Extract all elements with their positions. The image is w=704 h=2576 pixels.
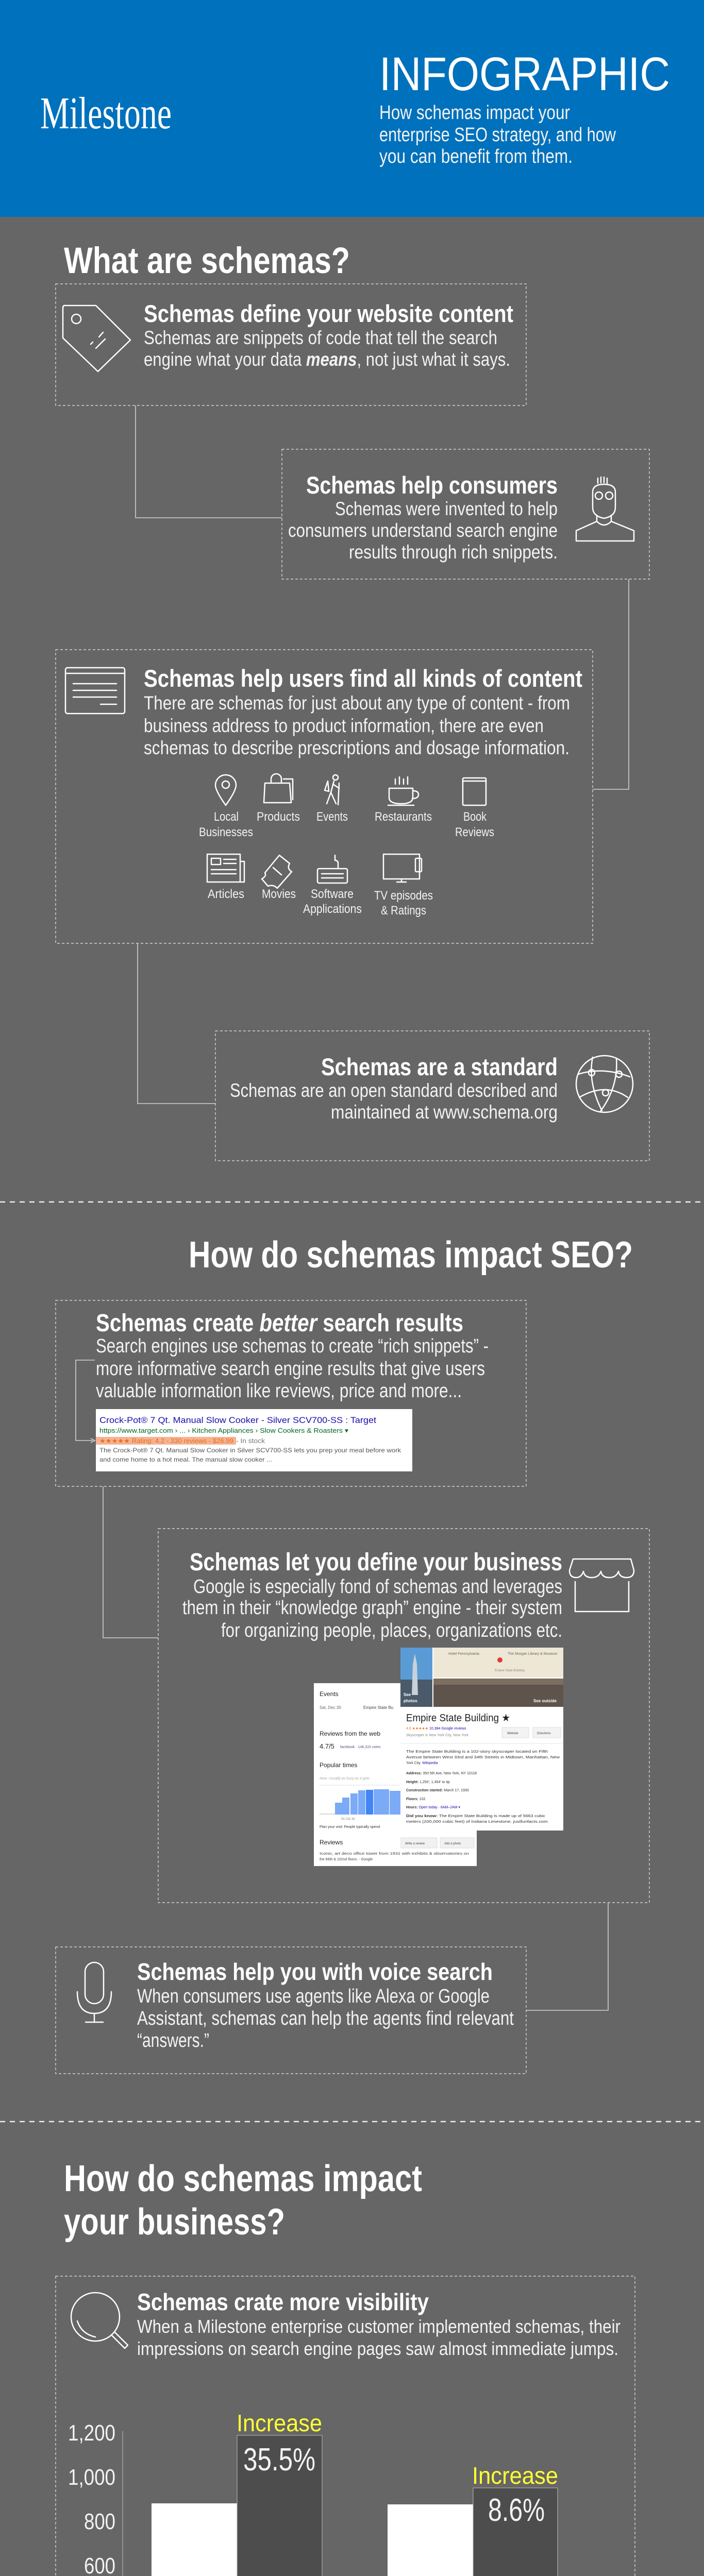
panel: schemas define your website content [56,284,526,405]
section title: What are schemas?: What are schemas? [64,241,350,281]
header title: INFOGRAPHIC [379,48,670,100]
screenshot: rich snippet: Crock-Pot® 7 Qt. Manual Slow Cooker - Silver SCV700-SS : Target [99,1415,376,1425]
left panel [314,1683,477,1866]
left panel: the 86th & 102nd floors. - Google [320,1858,373,1861]
icon labels: & Ratings [381,904,426,918]
heading: Schemas create better search results [96,1310,463,1337]
heading: Schemas crate more visibility [137,2289,429,2315]
right panel: Floors: 102 [406,1798,425,1801]
body text: Schemas were invented to help [335,498,558,519]
body text [137,1986,514,2052]
left panel: facebook · 146,315 votes [340,1745,381,1749]
heading: Schemas let you define your business [190,1549,562,1576]
right panel: 4.6 ★★★★★ 10,384 Google reviews [406,1726,466,1731]
screenshot: knowledge graph panels [314,1648,563,1866]
bar chart: impressions: Increase [472,2462,558,2489]
right panel: Construction started: March 17, 1930 [406,1789,469,1792]
panel: schemas help you with voice search [56,1947,526,2074]
icon: microphone [77,1962,111,2022]
left panel: Write a review [405,1842,425,1845]
body text: When a Milestone enterprise customer implemented schemas, their [137,2316,621,2337]
body text: When consumers use agents like Alexa or Google [137,1986,490,2007]
section title: How do schemas impact your business?: How do schemas impact [64,2158,422,2199]
body text: Schemas are snippets of code that tell the search [144,327,497,348]
body text: consumers understand search engine [288,520,558,541]
icon labels: Local [214,810,239,824]
right panel: meters (200,000 cubic feet) of Indiana Limestone. justfunfacts.com [406,1820,548,1824]
panel: schemas are a standard [215,1031,649,1161]
icon labels: Restaurants [375,810,432,824]
left panel: Now: Usually as busy as it gets [320,1777,370,1781]
section title: How do schemas impact your business?: your business? [64,2201,285,2243]
body text: Schemas are an open standard described and [230,1080,558,1101]
panel: schemas help consumers [282,449,649,579]
icon labels: Movies [262,887,296,901]
body text: business address to product information, there are even [144,715,544,736]
body text: valuable information like reviews, price and more... [96,1380,462,1402]
left panel: Popular times [320,1761,357,1769]
body text [144,692,570,758]
header subtitle: How schemas impact your [379,102,570,124]
screenshot: rich snippet: and come home to a hot meal. The manual slow cooker ... [99,1456,272,1463]
icon: tv [383,854,422,882]
icon: document window [65,668,125,714]
header subtitle [379,102,616,167]
right panel: Hours: Open today · 8AM–2AM ▾ [406,1806,461,1809]
arrow: connector 4 [103,1486,158,1638]
header subtitle: enterprise SEO strategy, and how [379,124,616,146]
icon labels: Applications [303,902,362,916]
section title: How do schemas impact your business? [64,2158,422,2243]
arrow: connector 2 [593,579,629,789]
icon labels: Software [311,887,354,901]
panel: schemas let you define your business [158,1529,649,1903]
screenshot: rich snippet: - In stock [236,1437,265,1445]
icon: movies ticket [262,855,292,888]
icon: person with glasses [576,477,634,541]
left panel: 4.7/5 [320,1742,334,1750]
icon labels: Products [257,810,300,824]
body text: Assistant, schemas can help the agents find relevant [137,2008,514,2029]
body text [144,327,510,370]
body text: them in their “knowledge graph” engine - their system [182,1597,562,1619]
arrow: bracket to rating [76,1360,95,1443]
screenshot: rich snippet: ★★★★★ Rating: 4.2 - 330 reviews - $26.99 [99,1437,233,1445]
icon labels: Book [463,810,487,824]
panel: schemas create better search results [56,1300,526,1486]
icon: book [463,778,486,805]
panel: schemas help users find all kinds of content [56,650,593,943]
bar chart: impressions: 35.5% [243,2442,315,2478]
panel: schemas crate more visibility [56,2276,635,2576]
icon labels: Articles [208,887,244,901]
body text: There are schemas for just about any type of content - from [144,692,570,714]
icon labels: Reviews [455,825,494,839]
right panel: Address: 350 5th Ave, New York, NY 10118 [406,1772,477,1775]
right panel: Hotel Pennsylvania [448,1652,479,1656]
right panel: The Morgan Library & Museum [508,1652,558,1656]
left panel: Events [320,1690,339,1698]
right panel: Did you know: The Empire State Building is made up of 5663 cubic [406,1815,546,1818]
right panel: Height: 1,250', 1,454' to tip [406,1781,450,1784]
header band [0,0,704,217]
arrow: connector 5 [526,1903,608,2010]
body text: for organizing people, places, organizations etc. [221,1620,562,1641]
right panel: See outside [533,1699,557,1703]
body text: more informative search engine results that give users [96,1358,485,1380]
body text [96,1335,489,1402]
bar chart: impressions: 1,000 [68,2465,115,2490]
right panel: Empire State Building [495,1669,525,1672]
body text: Search engines use schemas to create “rich snippets” - [96,1335,489,1357]
header subtitle: you can benefit from them. [379,146,573,167]
right panel: York City. Wikipedia [406,1761,438,1765]
heading: Schemas help you with voice search [137,1958,493,1985]
right panel [400,1648,563,1831]
body text: maintained at www.schema.org [331,1101,558,1123]
bar chart: impressions: 800 [84,2509,115,2534]
left panel: Reviews from the web [320,1730,380,1737]
body text: engine what your data means, not just what it says. [144,349,510,370]
body text [137,2316,621,2359]
icon grid: content types [199,774,494,918]
icon: tag [63,306,130,371]
body text [182,1576,562,1641]
body text [230,1080,558,1123]
body text: impressions on search engine pages saw almost immediate jumps. [137,2338,618,2359]
right panel: Skyscraper in New York City, New York [406,1734,468,1737]
icon labels: TV episodes [374,889,433,903]
arrow: connector 3 [138,943,215,1104]
body text: “answers.” [137,2030,209,2052]
left panel: 9a 12p 3p [341,1818,355,1821]
body text [288,498,558,563]
icon labels [199,810,494,918]
left panel: Add a photo [444,1842,461,1845]
icon: storefront [569,1559,634,1612]
body text: schemas to describe prescriptions and dosage information. [144,737,569,758]
left panel: Iconic, art deco office tower from 1931 with exhibits & observatories on [320,1852,469,1856]
heading: Schemas are a standard [321,1053,558,1080]
icon labels: Events [316,810,348,824]
logo: Milestone: Milestone [40,89,172,139]
divider [0,2121,704,2122]
right panel: See [404,1692,411,1697]
heading: Schemas help consumers [306,471,558,499]
heading: Schemas define your website content [144,300,513,327]
icon: products bag [264,774,293,803]
right panel: Avenue between West 33rd and 34th Streets in Midtown, Manhattan, New [406,1756,560,1759]
icon: articles newspaper [207,854,244,882]
bar chart: impressions: Increase [237,2410,322,2436]
icon: globe network [576,1056,633,1112]
heading: Schemas help users find all kinds of content [144,665,582,692]
divider [0,1201,704,1202]
left panel: Plan your visit: People typically spend [320,1825,380,1829]
bar chart: impressions [68,2410,595,2576]
icon: events hiker [325,775,339,805]
screenshot: rich snippet: https://www.target.com › ... › Kitchen Appliances › Slow Cookers & Roasters ▾ [99,1427,349,1434]
bar chart: impressions: 1,200 [68,2420,115,2446]
left panel: Sat, Dec 30 [320,1705,341,1710]
right panel: Directions [537,1732,551,1735]
screenshot: rich snippet [96,1409,412,1471]
arrow: connector 1 [136,405,282,518]
bar chart: impressions: 8.6% [488,2493,545,2528]
right panel: Empire State Building ★ [406,1713,510,1724]
icon: restaurants cup [388,777,418,805]
left panel: Empire State Bu [363,1705,393,1710]
icon labels: Businesses [199,825,253,839]
icon: local businesses pin [215,775,236,805]
right panel: photos [404,1699,417,1703]
body text: results through rich snippets. [349,541,558,563]
screenshot: rich snippet: The Crock-Pot® 7 Qt. Manual Slow Cooker in Silver SCV700-SS lets you prep your meal before work [99,1447,401,1454]
icon: magnifier [71,2293,128,2348]
right panel: The Empire State Building is a 102-story skyscraper located on Fifth [406,1750,548,1754]
icon: software keyboard [317,855,347,883]
right panel: Website [507,1732,518,1735]
body text: Google is especially fond of schemas and leverages [193,1576,562,1598]
left panel: Reviews [320,1839,343,1846]
